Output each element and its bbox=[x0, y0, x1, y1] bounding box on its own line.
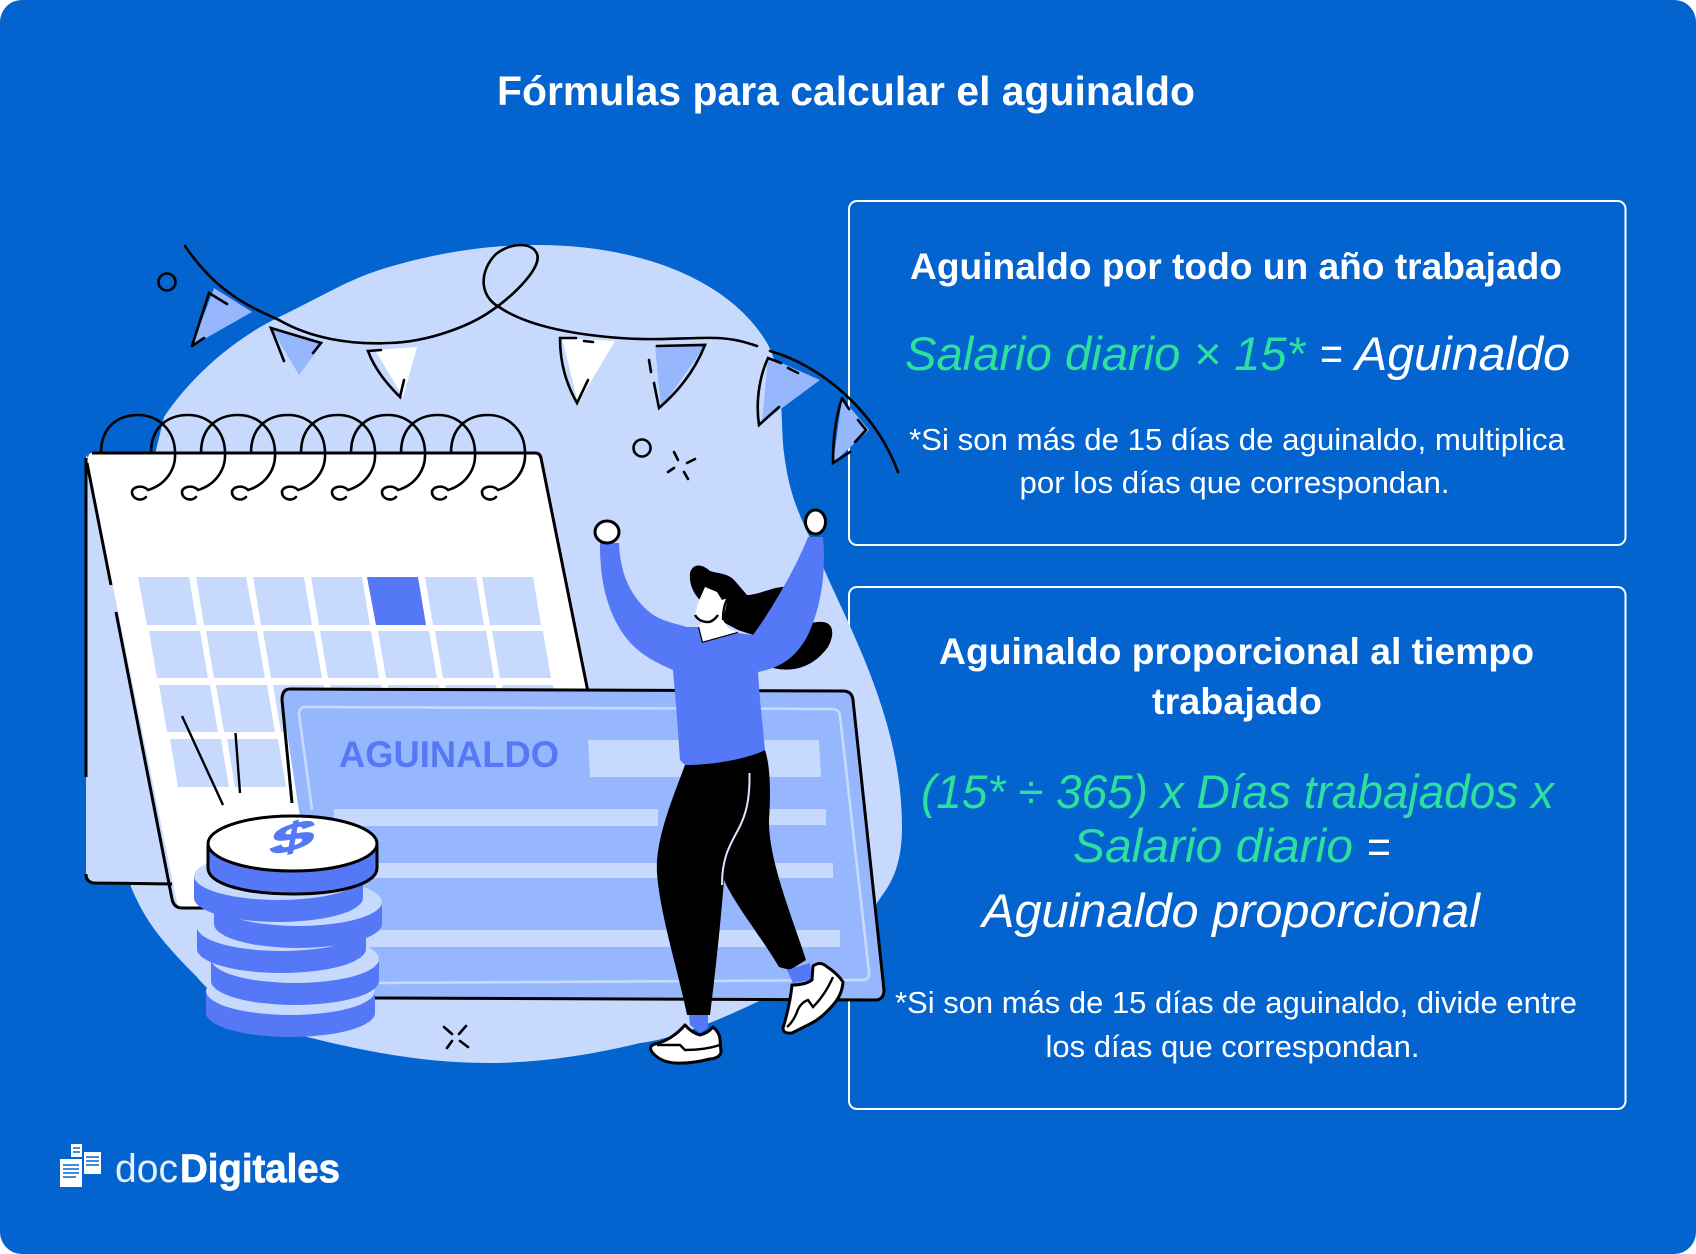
calendar back page bbox=[86, 455, 175, 884]
bunting strings bbox=[185, 245, 898, 472]
calendar tear lines bbox=[182, 716, 240, 805]
note: proportional: *Si son más de 15 días de aguinaldo, divide entre bbox=[895, 985, 1577, 1020]
note: proportional: los días que correspondan. bbox=[1046, 1029, 1420, 1064]
hair bbox=[690, 565, 790, 635]
formula: full year: Salario diario × 15* bbox=[905, 327, 1307, 380]
calendar grid bbox=[138, 577, 561, 787]
decorative circles and sparkles bbox=[158, 274, 695, 1048]
panel text: full year bbox=[905, 246, 1570, 500]
panel: proportional frame bbox=[849, 587, 1626, 1109]
cheque body bbox=[282, 689, 884, 1000]
woman celebrating bbox=[595, 510, 843, 1063]
heading: full year: Aguinaldo por todo un año trabajado bbox=[910, 246, 1562, 287]
formula: full year: Aguinaldo bbox=[1352, 327, 1570, 380]
illustration bbox=[86, 245, 902, 1063]
heading: proportional bbox=[939, 631, 1534, 722]
note: full year bbox=[909, 422, 1566, 500]
cheque inner border bbox=[299, 707, 869, 983]
logo icon bbox=[60, 1144, 101, 1187]
note: full year: *Si son más de 15 días de aguinaldo, multiplica bbox=[909, 422, 1566, 457]
formula: proportional: Salario diario bbox=[1073, 819, 1353, 872]
trouser seam bbox=[722, 773, 750, 885]
bunting flags bbox=[192, 288, 869, 463]
left shoe bbox=[651, 1025, 721, 1063]
lower coins bbox=[194, 852, 382, 1037]
formula: proportional: = bbox=[1367, 820, 1391, 873]
dollar sign: $ bbox=[266, 808, 319, 866]
formula: proportional bbox=[921, 765, 1555, 937]
formula: proportional: (15* ÷ 365) x Días trabajados x bbox=[921, 765, 1555, 818]
sweater bbox=[600, 537, 824, 765]
panel: full-year frame bbox=[849, 201, 1626, 545]
logo: Digitales bbox=[180, 1147, 340, 1191]
right shoe bbox=[783, 964, 843, 1033]
logo wordmark: doc bbox=[115, 1147, 178, 1191]
aguinaldo cheque bbox=[282, 689, 884, 1000]
socks bbox=[689, 963, 812, 1033]
calendar bbox=[86, 415, 590, 908]
formula: proportional: Aguinaldo proporcional bbox=[979, 884, 1482, 937]
cheque fields bbox=[334, 740, 840, 947]
cheque label: AGUINALDO bbox=[339, 734, 559, 775]
calendar ring backs bbox=[101, 415, 525, 453]
panel text: proportional bbox=[895, 631, 1577, 1064]
logo bbox=[60, 1144, 340, 1191]
top coin bbox=[208, 808, 377, 894]
coin stack bbox=[194, 808, 382, 1037]
note: proportional bbox=[895, 985, 1577, 1064]
formula: full year: = bbox=[1320, 327, 1343, 380]
calendar front page bbox=[88, 453, 590, 908]
legs bbox=[657, 750, 806, 1015]
note: full year: por los días que correspondan. bbox=[1020, 465, 1450, 500]
formula: full year bbox=[905, 327, 1570, 380]
hands bbox=[595, 510, 826, 543]
heading: proportional: Aguinaldo proporcional al tiempo bbox=[939, 631, 1534, 672]
heading: proportional: trabajado bbox=[1152, 681, 1322, 722]
calendar ring fronts bbox=[132, 453, 525, 499]
bunting bbox=[185, 245, 898, 472]
hair bun bbox=[770, 622, 832, 670]
title: Fórmulas para calcular el aguinaldo bbox=[497, 68, 1195, 114]
neck and face bbox=[695, 587, 738, 643]
background blob bbox=[120, 245, 902, 1063]
